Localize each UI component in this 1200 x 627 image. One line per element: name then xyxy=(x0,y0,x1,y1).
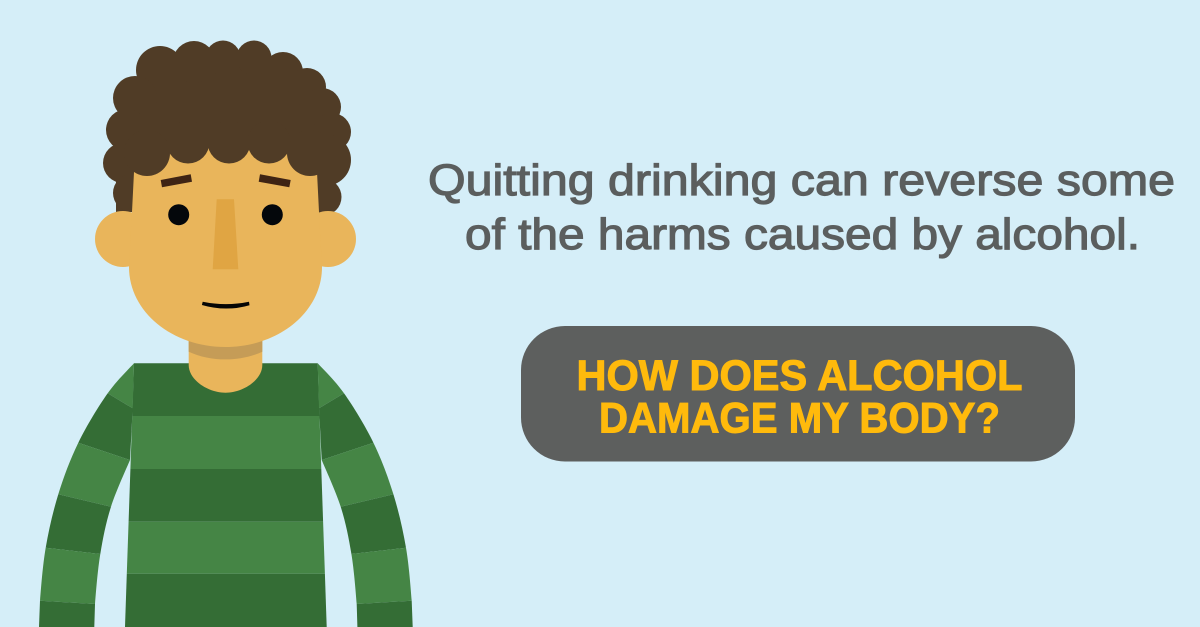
neck xyxy=(189,330,262,393)
mouth xyxy=(202,302,250,309)
headline text xyxy=(428,156,1175,259)
hair fringe xyxy=(124,105,333,176)
button: how does alcohol damage my body: HOW DOES ALCOHOL xyxy=(576,352,1022,400)
headline text: of the harms caused by alcohol. xyxy=(465,210,1140,259)
right sleeve xyxy=(318,363,413,627)
ears xyxy=(95,211,356,267)
button: how does alcohol damage my body: DAMAGE MY BODY? xyxy=(599,394,1000,442)
button: how does alcohol damage my body xyxy=(521,326,1075,462)
sweater body xyxy=(125,363,327,627)
nose xyxy=(213,199,238,269)
hair xyxy=(103,40,351,216)
character illustration xyxy=(39,40,413,627)
left eyebrow xyxy=(161,174,192,187)
right eye xyxy=(262,204,283,225)
neck shadow xyxy=(189,335,262,359)
left sleeve xyxy=(39,363,134,627)
headline text: Quitting drinking can reverse some xyxy=(428,156,1175,205)
left eye xyxy=(168,204,189,225)
face xyxy=(129,130,322,347)
right eyebrow xyxy=(259,174,291,187)
